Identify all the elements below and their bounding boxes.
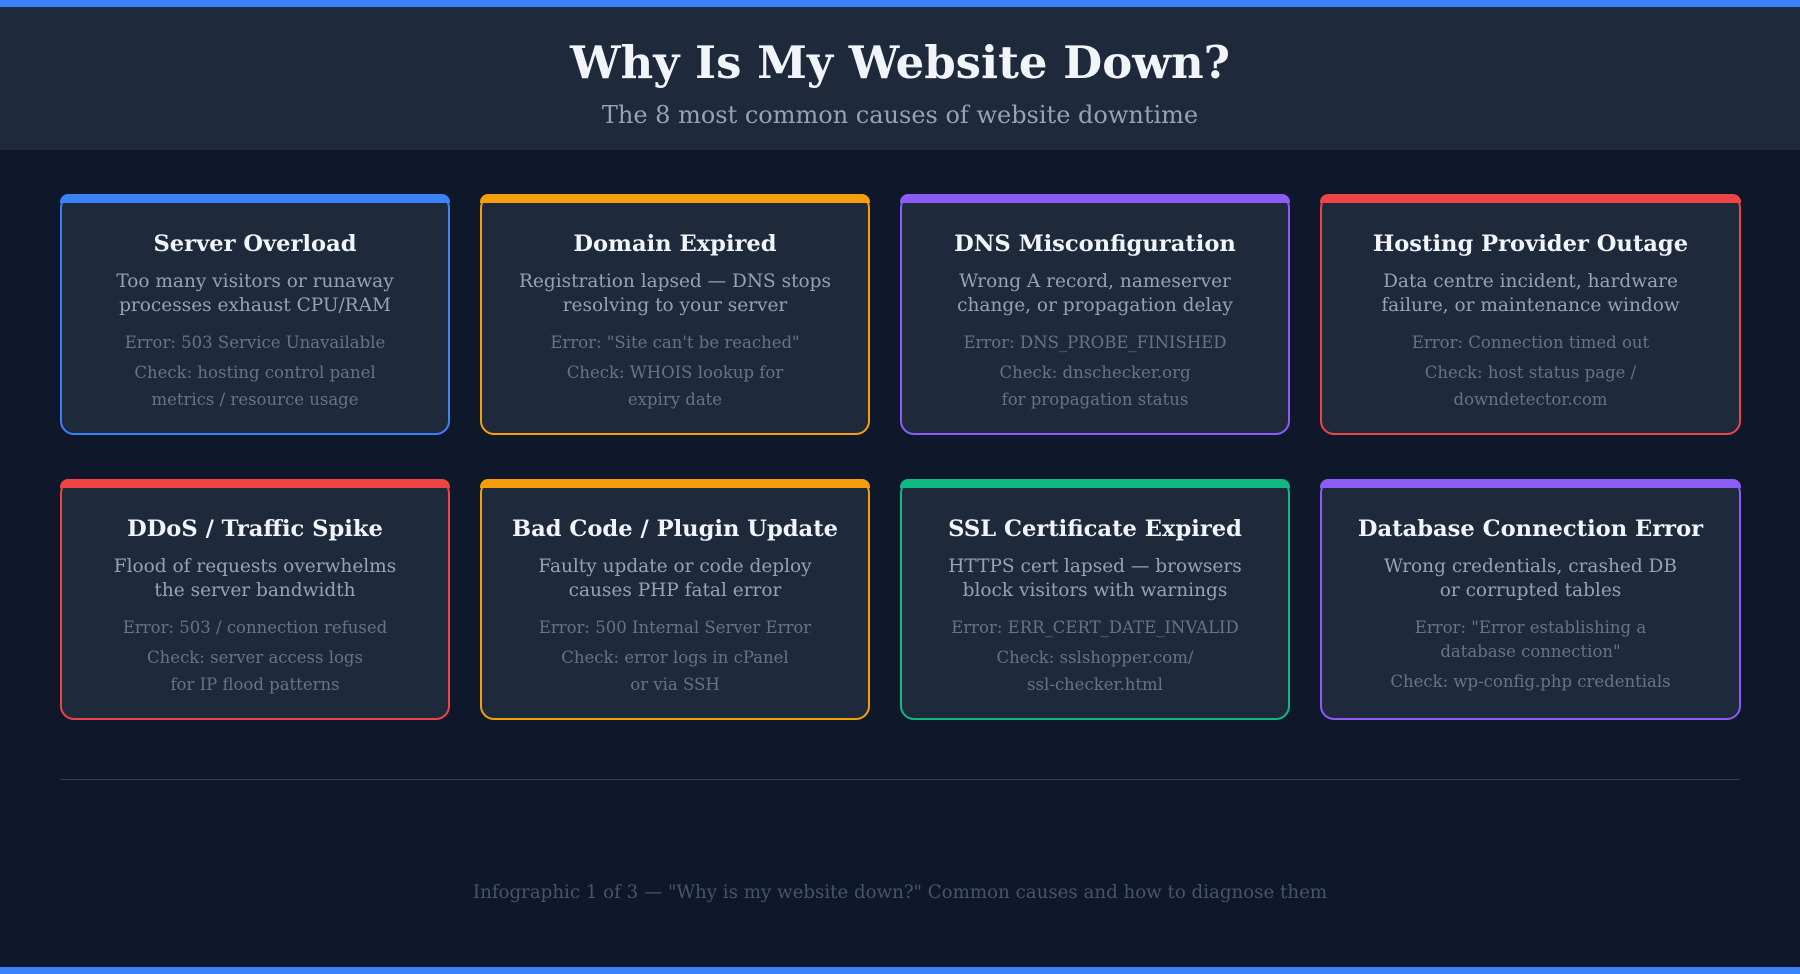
card: Domain Expired: Registration lapsed — DNS stops xyxy=(519,271,831,292)
card: DNS Misconfiguration: Error: DNS_PROBE_FINISHED xyxy=(963,333,1227,352)
card: SSL: SSL Certificate Expired xyxy=(948,516,1242,542)
subtitle: The 8 most common causes of website downtime xyxy=(602,101,1198,129)
card: Hosting Provider Outage: Check: host status page / xyxy=(1425,363,1636,382)
card: Hosting Provider Outage: Data centre incident, hardware xyxy=(1383,271,1678,292)
card: DNS Misconfiguration: Wrong A record, nameserver xyxy=(959,271,1231,292)
card: Database: Database Connection Error xyxy=(1358,516,1703,542)
card: DDoS: DDoS / Traffic Spike xyxy=(127,516,383,542)
card: Domain Expired: resolving to your server xyxy=(563,295,787,316)
card: SSL xyxy=(900,479,1290,720)
card: Database xyxy=(1320,479,1741,720)
card: DNS Misconfiguration: for propagation status xyxy=(1002,390,1188,409)
card: Domain Expired: Check: WHOIS lookup for xyxy=(567,363,783,382)
card: SSL: Check: sslshopper.com/ xyxy=(997,648,1193,667)
card: DDoS: for IP flood patterns xyxy=(170,675,340,694)
card: Domain Expired xyxy=(480,194,870,435)
card: Server Overload: Error: 503 Service Unavailable xyxy=(125,333,385,352)
card: Hosting Provider Outage: downdetector.com xyxy=(1454,390,1607,409)
card: Bad Code: Bad Code / Plugin Update xyxy=(512,516,838,542)
card: DDoS: the server bandwidth xyxy=(154,580,356,601)
header xyxy=(0,7,1800,150)
card: Bad Code: Faulty update or code deploy xyxy=(538,556,812,577)
card: Server Overload: Server Overload xyxy=(153,231,357,257)
card: Database: Wrong credentials, crashed DB xyxy=(1384,556,1677,577)
card: SSL: HTTPS cert lapsed — browsers xyxy=(948,556,1242,577)
card: DDoS: Flood of requests overwhelms xyxy=(114,556,396,577)
card: Domain Expired: Domain Expired xyxy=(573,231,777,257)
card: DNS Misconfiguration: change, or propagation delay xyxy=(957,295,1233,316)
card: Bad Code: causes PHP fatal error xyxy=(569,580,781,601)
card: Server Overload: metrics / resource usage xyxy=(151,390,359,409)
card: Server Overload: Too many visitors or runaway xyxy=(116,271,394,292)
card: Bad Code: or via SSH xyxy=(630,675,720,694)
card: SSL: ssl-checker.html xyxy=(1027,675,1163,694)
card: Database: Check: wp-config.php credentials xyxy=(1390,672,1671,691)
card: DNS Misconfiguration: Check: dnschecker.org xyxy=(999,363,1191,382)
card: Domain Expired: expiry date xyxy=(628,390,722,409)
card: Bad Code: Error: 500 Internal Server Error xyxy=(539,618,811,637)
card: Hosting Provider Outage: failure, or maintenance window xyxy=(1381,295,1680,316)
card: Database: database connection" xyxy=(1440,642,1621,661)
card: SSL: block visitors with warnings xyxy=(963,580,1227,601)
card: DNS Misconfiguration: DNS Misconfiguration xyxy=(954,231,1236,257)
card: Database: or corrupted tables xyxy=(1440,580,1621,601)
card: Bad Code xyxy=(480,479,870,720)
card: Bad Code: Check: error logs in cPanel xyxy=(561,648,789,667)
card: DNS Misconfiguration xyxy=(900,194,1290,435)
card: Hosting Provider Outage xyxy=(1320,194,1741,435)
card: DDoS xyxy=(60,479,450,720)
card: Server Overload: processes exhaust CPU/RAM xyxy=(119,295,391,316)
card: Hosting Provider Outage: Hosting Provider Outage xyxy=(1373,231,1688,257)
card: Database: Error: "Error establishing a xyxy=(1415,618,1646,637)
card: Hosting Provider Outage: Error: Connection timed out xyxy=(1412,333,1649,352)
card: DDoS: Error: 503 / connection refused xyxy=(123,618,387,637)
title: Why Is My Website Down? xyxy=(570,36,1230,89)
card: Server Overload: Check: hosting control panel xyxy=(134,363,376,382)
card: DDoS: Check: server access logs xyxy=(147,648,363,667)
card: Domain Expired: Error: "Site can't be reached" xyxy=(550,333,800,352)
card: Server Overload xyxy=(60,194,450,435)
footer: Infographic 1 of 3 — "Why is my website down?" Common causes and how to diagnose them xyxy=(473,882,1327,903)
card: SSL: Error: ERR_CERT_DATE_INVALID xyxy=(951,618,1239,637)
